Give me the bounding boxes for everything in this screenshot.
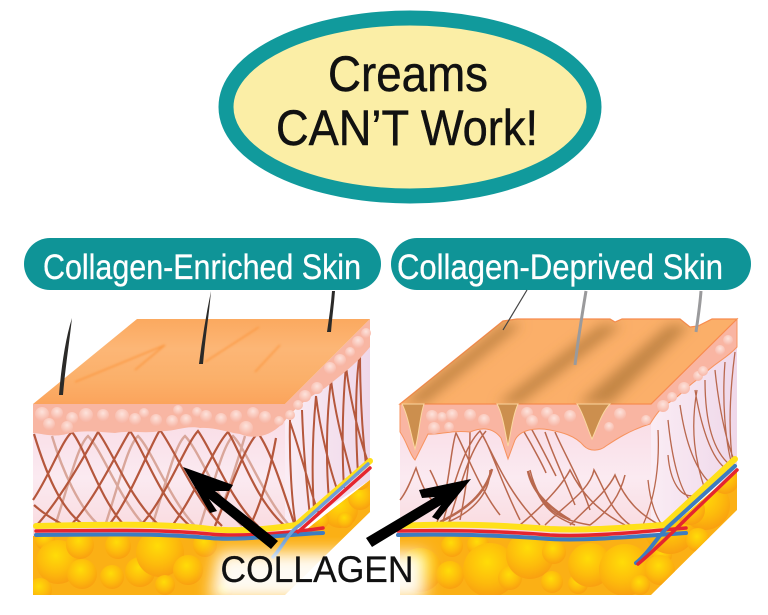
collagen net: side face <box>290 352 368 526</box>
epidermis layer <box>400 319 737 460</box>
arrow: left to enriched collagen <box>183 467 278 549</box>
epidermis cells <box>35 328 371 435</box>
wrinkle notches <box>402 404 610 449</box>
faint collagen net <box>52 436 290 526</box>
skin surface <box>400 319 737 404</box>
skin diagram: enriched <box>28 291 373 602</box>
white glow behind label <box>210 552 425 600</box>
title text: Creams <box>328 46 488 102</box>
label: collagen: COLLAGEN <box>220 549 414 590</box>
title text: CAN’T Work! <box>276 100 538 156</box>
arrow: right to deprived collagen <box>366 479 471 547</box>
heading pill: collagen-deprived skin: Collagen-Deprived Skin <box>397 248 723 287</box>
hairs <box>59 291 335 395</box>
skin surface <box>33 319 370 404</box>
epidermis layer <box>33 319 370 437</box>
title oval <box>226 18 594 196</box>
hairs <box>503 290 527 330</box>
collagen net <box>33 430 295 526</box>
heading pill: collagen-enriched skin <box>24 238 381 290</box>
heading pill: collagen-enriched skin: Collagen-Enriched Skin <box>43 248 361 287</box>
skin diagram: deprived <box>398 290 740 597</box>
skin surface creases <box>75 327 280 382</box>
damaged collagen fibres <box>400 428 660 525</box>
blood vessels <box>36 461 370 557</box>
epidermis cells <box>426 335 733 434</box>
fat layer <box>33 480 370 595</box>
blood vessels <box>398 459 737 564</box>
fat layer <box>398 465 740 597</box>
wrinkle folds <box>403 324 690 404</box>
dermis faces <box>33 420 285 536</box>
dermis faces <box>400 420 651 536</box>
damaged collagen: side face <box>643 352 735 525</box>
